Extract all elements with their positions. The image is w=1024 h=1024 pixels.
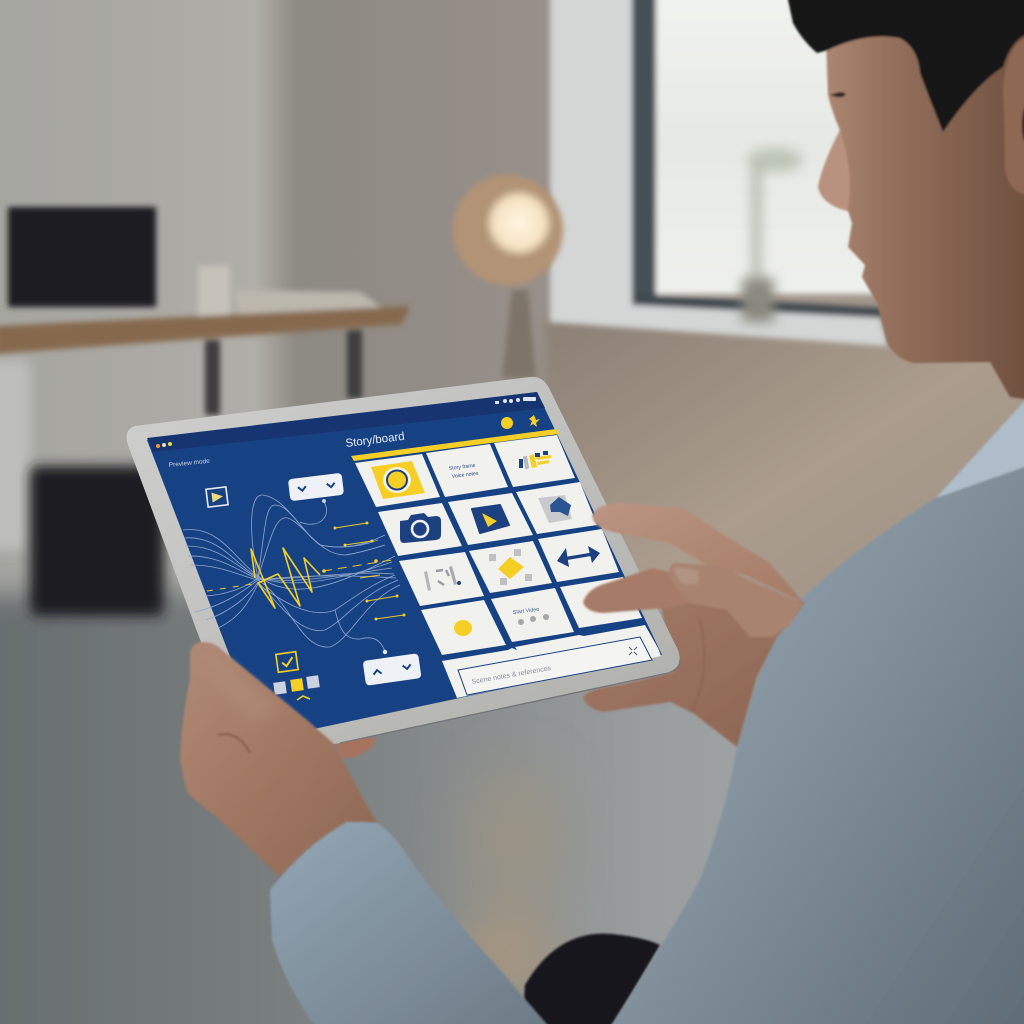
cell: text tile: Voice notes (452, 471, 479, 480)
window control dots (156, 442, 172, 448)
cell: caption tile: Start Video (513, 607, 540, 616)
cell: diamond tile (469, 541, 552, 593)
palm crease (218, 734, 250, 753)
cell: yellow circle tile (355, 454, 440, 507)
cell: double arrow tile (538, 529, 619, 582)
thumb highlight (196, 651, 280, 725)
waste bin (30, 466, 164, 616)
left caption: Preview mode (168, 458, 211, 469)
person: neck and face (787, 0, 1024, 400)
tablet dark lower edge (340, 660, 680, 743)
checkbox icon (276, 652, 298, 672)
top pill button (288, 473, 344, 501)
cell: gray photo tile (516, 482, 597, 534)
floor (0, 580, 830, 1024)
index finger (592, 503, 803, 602)
step squares (273, 675, 320, 700)
floor lamp (453, 175, 563, 378)
play icon (206, 487, 228, 507)
window plant (742, 148, 803, 322)
desk with laptop (0, 207, 410, 415)
shirt collar (936, 395, 1024, 498)
nose highlight (818, 130, 850, 211)
yellow zigzag signal (251, 548, 320, 608)
status bar (147, 392, 545, 452)
cell: yellow dot tile (421, 600, 506, 655)
cell: camera tile (378, 503, 462, 556)
storyboard grid (355, 435, 642, 655)
thumb nail (674, 567, 698, 584)
hair (787, 0, 1024, 132)
window recess (550, 0, 888, 346)
tablet bezel (127, 377, 680, 761)
bottom input panel: Scene notes & references (471, 665, 552, 686)
cell: blank tile (560, 577, 642, 628)
status icons (495, 397, 536, 404)
floor reflection (450, 765, 565, 995)
eye (830, 92, 846, 97)
ear (1003, 35, 1024, 195)
header yellow dot (501, 417, 513, 429)
yellow end dots (322, 522, 406, 620)
shirt sleeve and cuff (270, 822, 552, 1024)
thumb (669, 563, 803, 637)
left hand: fingers behind tablet (335, 737, 375, 758)
bottom pill button (363, 653, 422, 686)
cell: bars tile (399, 552, 484, 606)
cell: text tile: Story frame (449, 463, 476, 472)
cell: chart tile (494, 435, 575, 487)
left wall light strip (0, 360, 30, 550)
tablet screen (147, 392, 662, 740)
ear shadow (1022, 107, 1024, 143)
palm creases (692, 620, 704, 712)
left hand holding tablet (180, 642, 377, 877)
tablet (127, 377, 680, 761)
cell: caption tile (491, 588, 574, 642)
cell: text tile (426, 444, 508, 497)
app title: Story/board (345, 431, 405, 450)
person: trousers (522, 934, 660, 1024)
middle finger (583, 568, 690, 613)
yellow header rule (351, 429, 559, 461)
right hand: fingers over tablet (583, 503, 803, 712)
header star (529, 415, 540, 427)
person: shirt body (608, 395, 1024, 1024)
bottom input panel (442, 625, 661, 698)
lower right wall (545, 320, 1024, 640)
waveform chart (183, 495, 406, 654)
flow lines (183, 495, 400, 652)
cell: play tile (448, 493, 533, 545)
right hand: lower finger and palm behind tablet (583, 595, 805, 747)
yellow dashes (207, 523, 404, 619)
